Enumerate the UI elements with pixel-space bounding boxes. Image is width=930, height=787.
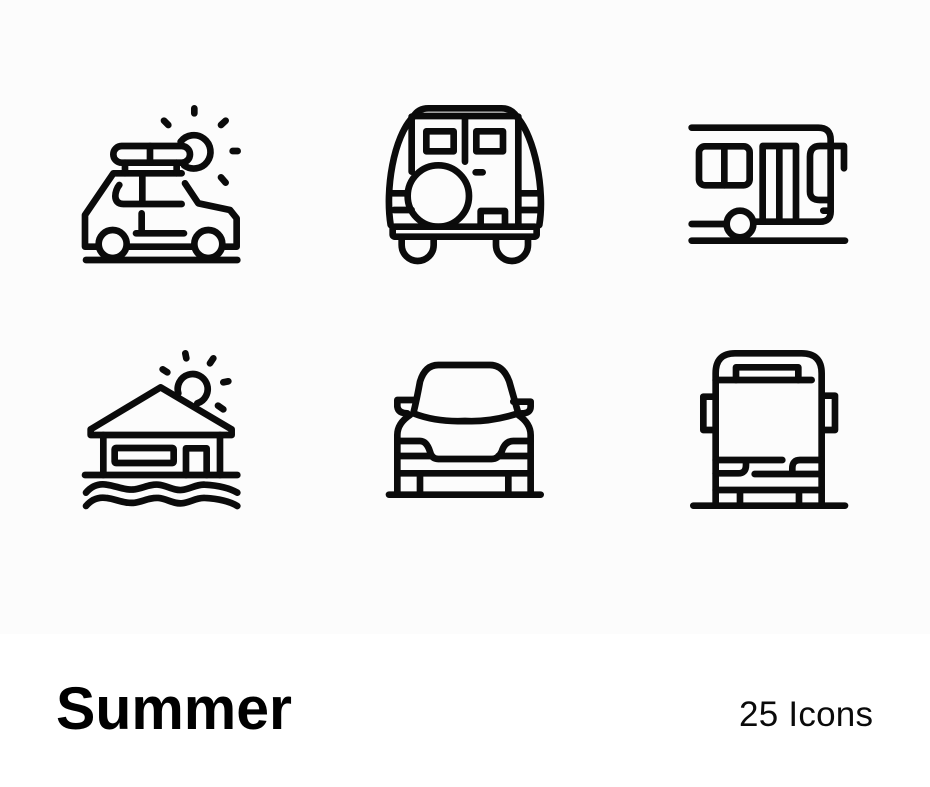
icon count: 25 Icons xyxy=(739,695,873,734)
icon: bus side view xyxy=(692,128,845,241)
icon: house on water with sun xyxy=(85,353,237,506)
icon: camper van rear view xyxy=(389,108,541,261)
icon: car front view xyxy=(389,365,541,495)
icon: car with roof box and sun xyxy=(85,108,238,260)
title: Summer xyxy=(56,675,292,742)
icon: bus front view xyxy=(693,353,845,506)
